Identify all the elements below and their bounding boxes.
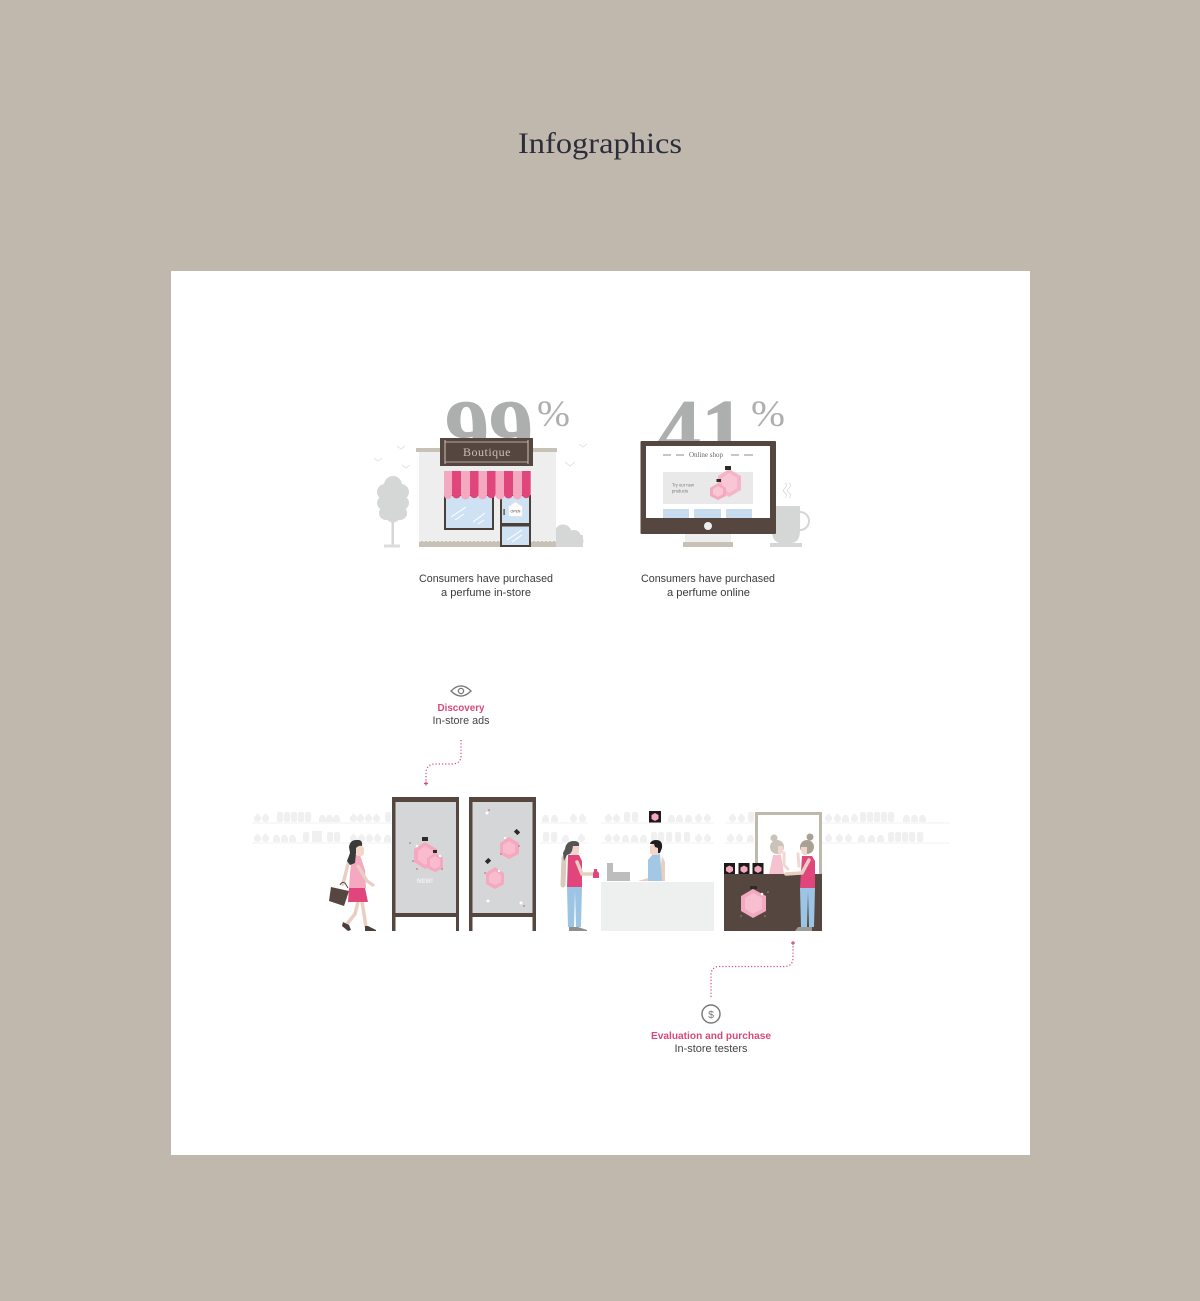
caption: in-store purchase [419, 573, 553, 599]
left window [445, 495, 493, 529]
building [419, 452, 556, 547]
caption: online purchase: a perfume online [667, 587, 750, 599]
label: discovery: Discovery [438, 702, 485, 714]
icon: dollar coin: $ [708, 1009, 714, 1021]
tester counter with perfume boxes [724, 863, 822, 931]
figure: walking woman with bag [329, 840, 376, 931]
arrow: discovery dotted path [424, 740, 461, 786]
panel: left advertising board: NEW! [417, 879, 433, 885]
icon: computer monitor with online shop: Online shop [689, 451, 724, 459]
figure: shopper holding perfume [563, 841, 599, 931]
caption: online purchase [641, 573, 775, 599]
panel: right advertising board [469, 797, 536, 931]
label: evaluation and purchase: In-store testers [674, 1043, 748, 1055]
label: evaluation and purchase [651, 1030, 771, 1055]
coffee mug [770, 483, 809, 547]
stat: 99 percent number: % [537, 394, 570, 435]
caption: in-store purchase: Consumers have purchased [419, 573, 553, 585]
caption: online purchase: Consumers have purchased [641, 573, 775, 585]
open sign [509, 502, 522, 516]
awning [444, 471, 531, 500]
icon: computer monitor with online shop: products [672, 488, 688, 494]
icon: dollar coin [702, 1005, 720, 1023]
figure: cashier [638, 840, 665, 881]
label: discovery: In-store ads [432, 715, 490, 727]
icon: computer monitor with online shop: Try our new [672, 482, 695, 488]
mirror with reflection [756, 814, 820, 876]
stat: 41 percent number: 41 [657, 383, 745, 480]
sign [440, 438, 533, 466]
stat: 41 percent number: % [751, 394, 785, 435]
stat: 41 percent number [657, 383, 785, 480]
icon: eye [451, 686, 471, 696]
door [501, 495, 530, 546]
icon: boutique shop illustration [374, 438, 587, 548]
label: discovery [432, 702, 490, 727]
caption: in-store purchase: a perfume in-store [441, 587, 531, 599]
white panel [171, 271, 1030, 1155]
title: Infographics [518, 127, 682, 160]
icon: perfume box on shelf [649, 811, 661, 822]
shelves background [252, 812, 950, 843]
icon: boutique shop illustration: OPEN [511, 510, 521, 514]
stat: 99 percent number: 99 [445, 383, 533, 480]
tree [377, 476, 409, 548]
icon: computer monitor with online shop [640, 441, 809, 547]
counter with cash register [601, 863, 714, 931]
label: evaluation and purchase: Evaluation and purchase [651, 1030, 771, 1042]
arrow: evaluation dotted path [711, 941, 795, 997]
bush [554, 524, 584, 547]
icon: boutique shop illustration: Boutique [463, 445, 511, 459]
figure: customer testing perfume [786, 834, 815, 931]
panel: left advertising board [392, 797, 459, 931]
